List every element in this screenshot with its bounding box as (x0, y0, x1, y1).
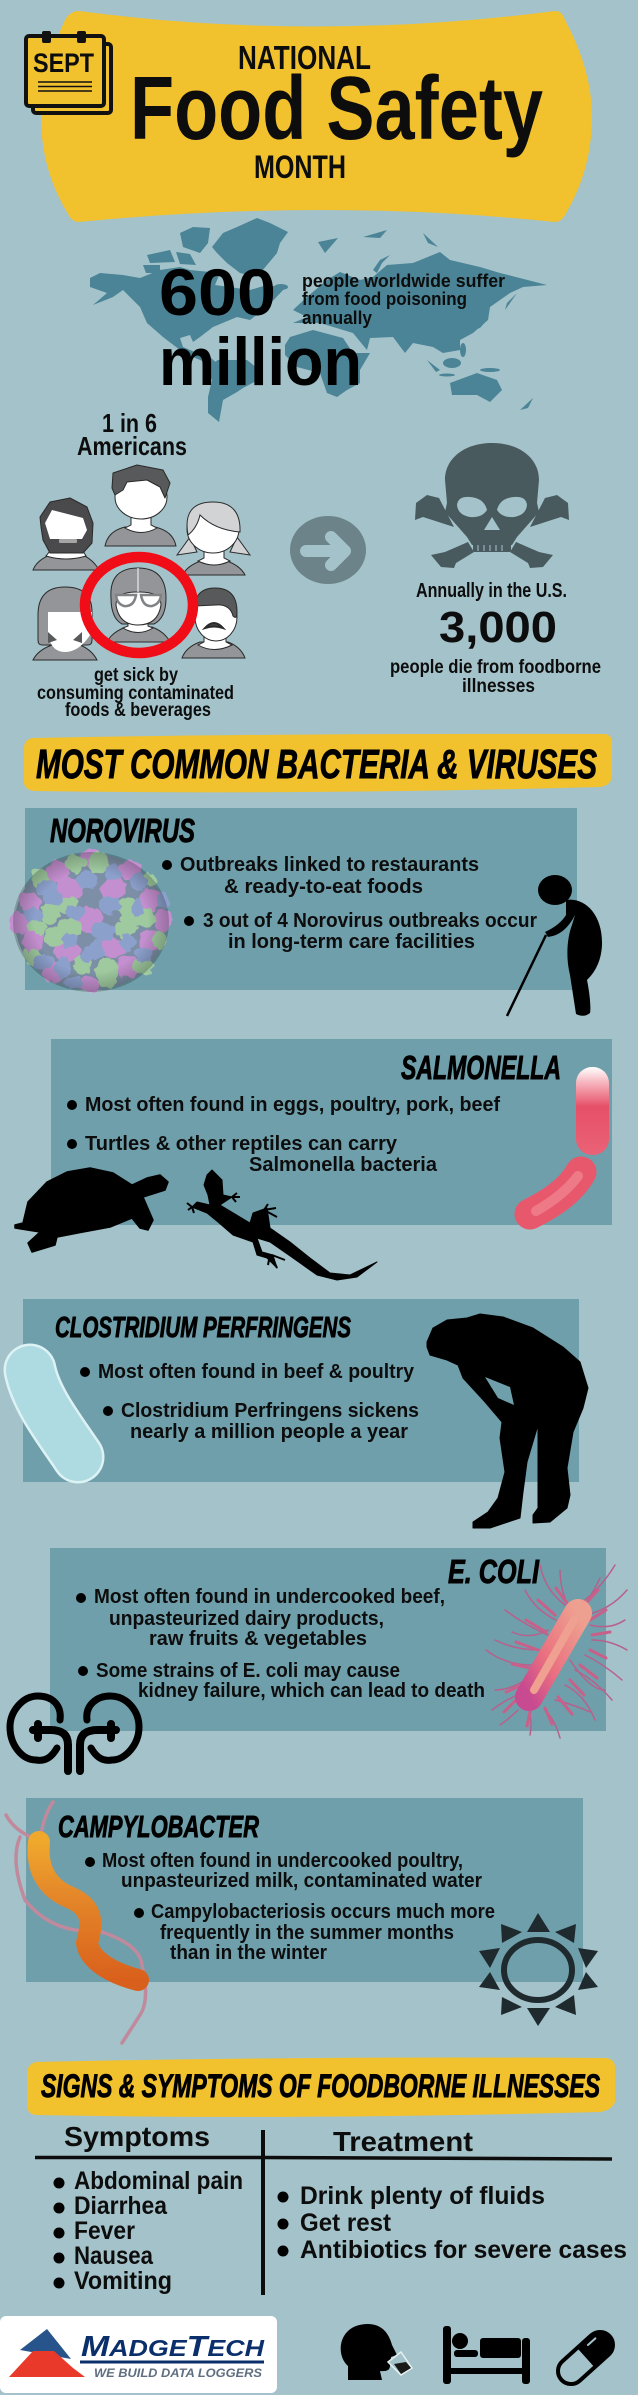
statistic: 3,000 deaths (390, 580, 601, 697)
image: campylobacter bacterium (6, 1802, 146, 2043)
column: symptoms: Vomiting (74, 2267, 172, 2295)
icon: turtle (15, 1168, 168, 1252)
bullets: Most often found in eggs, poultry, pork, beef (85, 1094, 500, 1116)
statistic: 600 million: annually (302, 308, 372, 328)
person: pigtails (177, 502, 250, 575)
heading: clostridium perfringens: CLOSTRIDIUM PERFRINGENS (55, 1312, 351, 1344)
column: treatment: Get rest (300, 2209, 392, 2237)
title banner: NATIONAL (238, 39, 371, 76)
bullets: & ready-to-eat foods (224, 876, 423, 898)
person: long hair (33, 587, 97, 660)
bullets: 3 out of 4 Norovirus outbreaks occur (203, 910, 537, 932)
bullets: in long-term care facilities (228, 931, 475, 953)
heading: 1 in 6 Americans: Americans (77, 431, 187, 461)
column: symptoms: Symptoms (64, 2121, 210, 2152)
caption: get sick: consuming contaminated (37, 683, 234, 704)
bullets: raw fruits & vegetables (149, 1628, 367, 1650)
statistic: 3,000 deaths: people die from foodborne (390, 657, 601, 678)
panel: salmonella (15, 1039, 612, 1280)
bullets (76, 1586, 485, 1702)
panel: campylobacter (6, 1798, 598, 2043)
image: norovirus particle (12, 851, 170, 992)
column: symptoms: Nausea (74, 2242, 154, 2270)
bullets: unpasteurized dairy products, (109, 1608, 384, 1630)
world map (90, 218, 547, 422)
bullets: Clostridium Perfringens sickens (121, 1400, 419, 1422)
bullets (85, 1850, 495, 1964)
icon: calendar SEPT: SEPT (33, 48, 94, 78)
caption: get sick: get sick by (94, 665, 178, 686)
column: symptoms: Abdominal pain (74, 2167, 243, 2195)
bullets: kidney failure, which can lead to death (138, 1680, 485, 1702)
icon: elderly person with cane (507, 875, 602, 1016)
heading: 1 in 6 Americans: 1 in 6 (102, 408, 157, 438)
bullets: Turtles & other reptiles can carry (85, 1133, 398, 1155)
bullets (80, 1361, 419, 1443)
statistic: 600 million: million (159, 324, 362, 400)
bullets: Some strains of E. coli may cause (96, 1660, 400, 1682)
person: top (105, 465, 176, 546)
bullets: Most often found in beef & poultry (98, 1361, 415, 1383)
icon: bed rest (443, 2326, 530, 2384)
logo: MadgeTech: MADGE TECH (81, 2331, 264, 2363)
column: treatment: Drink plenty of fluids (300, 2182, 545, 2210)
panel: clostridium perfringens (23, 1299, 588, 1528)
icon: calendar SEPT (26, 31, 111, 113)
icon: skull and crossbones (415, 443, 569, 568)
person: moustache (182, 588, 245, 658)
caption: get sick: foods & beverages (65, 700, 211, 721)
person: bearded (33, 498, 99, 570)
icon: kidneys (10, 1696, 139, 1771)
image: clostridium bacterium (30, 1370, 78, 1457)
heading: campylobacter: CAMPYLOBACTER (58, 1809, 259, 1844)
column: treatment: Treatment (333, 2126, 473, 2157)
statistic: 3,000 deaths: Annually in the U.S. (416, 580, 567, 602)
bullets (67, 1094, 500, 1176)
statistic: 600 million: people worldwide suffer (302, 271, 505, 291)
image: salmonella bacterium (530, 1067, 609, 1214)
heading: signs and symptoms (27, 2058, 615, 2117)
heading: 1 in 6 Americans (77, 408, 187, 461)
bullets: Most often found in undercooked beef, (94, 1586, 445, 1608)
logo: MadgeTech (0, 2316, 277, 2393)
icon: lizard (187, 1170, 377, 1280)
statistic: 3,000 deaths: 3,000 (439, 603, 557, 652)
heading: norovirus: NOROVIRUS (50, 812, 195, 849)
image: e. coli bacterium (486, 1565, 627, 1738)
logo: MadgeTech: WE BUILD DATA LOGGERS (94, 2368, 262, 2380)
panel: norovirus (12, 808, 602, 1016)
caption: get sick (37, 665, 234, 721)
heading: e. coli: E. COLI (448, 1553, 540, 1590)
bullets: Most often found in undercooked poultry, (102, 1850, 463, 1872)
heading: salmonella: SALMONELLA (401, 1049, 561, 1086)
icon: drinking fluids (341, 2324, 412, 2380)
people group (33, 465, 250, 660)
bullets: nearly a million people a year (130, 1421, 408, 1443)
column: treatment: Antibiotics for severe cases (300, 2236, 627, 2264)
callout: red circle (85, 557, 193, 653)
bullets: than in the winter (170, 1942, 327, 1964)
bullets: Outbreaks linked to restaurants (180, 854, 479, 876)
title banner: Food Safety (130, 59, 543, 159)
column: symptoms: Fever (74, 2217, 135, 2245)
column: symptoms: Diarrhea (74, 2192, 168, 2220)
table: symptoms and treatment (35, 2121, 627, 2295)
statistic: 600 million: from food poisoning (302, 289, 467, 309)
statistic: 600 million: 600 (159, 255, 276, 329)
statistic: 3,000 deaths: illnesses (462, 676, 535, 697)
person: glasses, highlighted (107, 568, 170, 642)
title banner: MONTH (254, 149, 346, 185)
bullets: unpasteurized milk, contaminated water (121, 1870, 482, 1892)
bullets (162, 854, 537, 953)
panel: e. coli (10, 1548, 627, 1771)
icon: sun (479, 1913, 598, 2026)
column: symptoms (54, 2121, 243, 2295)
bullets: Campylobacteriosis occurs much more (151, 1901, 495, 1923)
arrow (290, 516, 366, 584)
statistic: 600 million (159, 255, 505, 400)
column: treatment (278, 2126, 627, 2264)
title banner (41, 11, 592, 222)
bullets: Salmonella bacteria (249, 1154, 438, 1176)
icon: pill (553, 2327, 618, 2389)
icon: sick man (427, 1314, 588, 1528)
bullets: frequently in the summer months (160, 1922, 454, 1944)
